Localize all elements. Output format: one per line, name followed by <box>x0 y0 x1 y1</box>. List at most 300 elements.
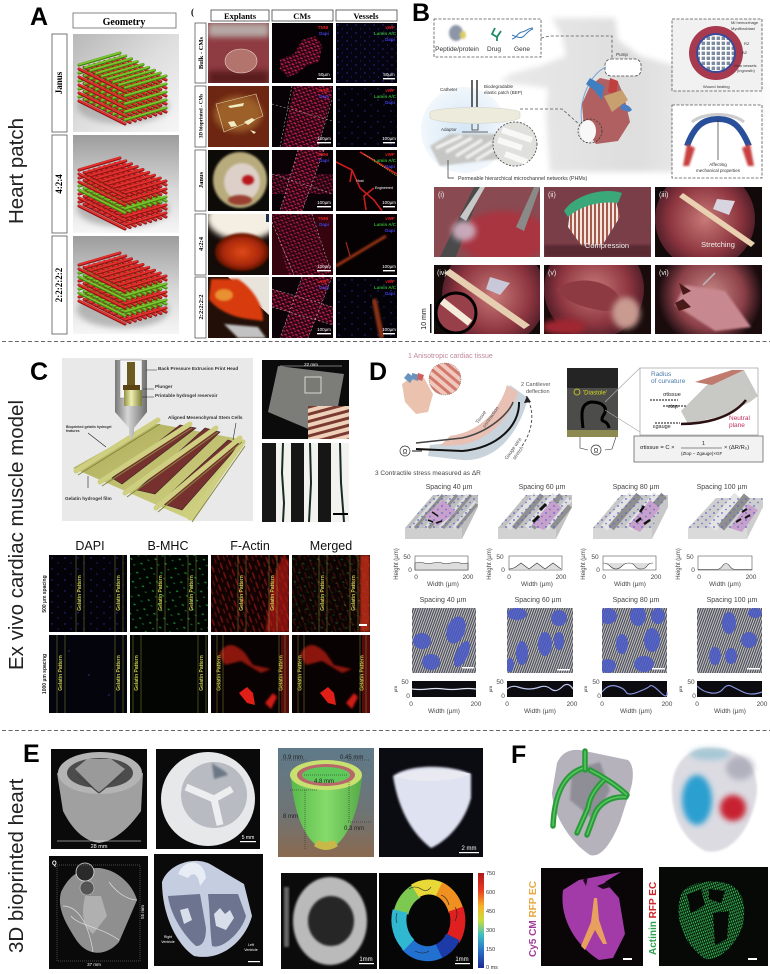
PHMs label: Permeable hierarchical microchannel networks (PHMs) <box>458 176 587 182</box>
detail labels <box>651 371 751 430</box>
column header CMs: CMs <box>293 11 311 21</box>
ohm loop: Ω <box>594 448 599 454</box>
CMs row 1: TNNI <box>318 25 328 30</box>
xz strip 40: 0 <box>406 693 410 700</box>
column header Vessels: Vessels <box>353 11 379 21</box>
ventricle CAD model: 0.3 mm <box>344 826 364 832</box>
stray bracket: ( <box>191 7 194 17</box>
vessels row 5: 100µm <box>382 327 396 332</box>
ventricle slice micrograph: 1mm <box>359 957 373 963</box>
row label 2:2:2:2:2 <box>195 277 206 338</box>
lattice render: 4:2:4 <box>73 135 179 233</box>
colour bar with scale <box>478 871 498 971</box>
height axis label 3: Height (µm) <box>581 548 587 580</box>
height profile 60: 200 <box>556 574 567 581</box>
CMs row 5 <box>272 277 333 338</box>
payload labels: Peptide/protein <box>435 46 479 53</box>
channel headers: F-Actin <box>230 539 270 553</box>
height axis label 4: Height (µm) <box>676 548 682 580</box>
catheter <box>472 80 477 107</box>
channel headers: DAPI <box>75 539 105 553</box>
xz strip 60: Width (µm) <box>524 708 556 715</box>
scale bar 10 mm: 10 mm <box>421 308 428 330</box>
vessels row 1 <box>336 23 397 83</box>
vessels row 1: vWF <box>385 25 395 30</box>
stripe micrograph <box>262 443 349 522</box>
panel D <box>369 353 768 715</box>
connector from payload box to pump <box>541 36 612 59</box>
film feature labels: Bioprinted gelatin hydrogel <box>66 425 112 429</box>
CMs row 2: Dapi <box>319 94 329 99</box>
vessels row 3: Engineered <box>375 186 393 190</box>
panel A: geometry <box>30 3 179 334</box>
vessels row 2: 100µm <box>382 136 396 141</box>
C micrograph Actin 500: Gelatin Pattern <box>239 575 245 611</box>
tissue detail circle <box>429 363 461 395</box>
Actinin RFP EC label: Actinin RFP EC <box>648 882 659 955</box>
xz strip 100: 50 <box>687 679 695 686</box>
row label Janus: Janus <box>54 71 64 94</box>
explant photo row 3 <box>208 150 269 211</box>
cantilever labels: Gauge wire <box>504 437 523 461</box>
height profile 80 <box>591 554 662 588</box>
printed construct photo: 22 mm <box>304 362 318 367</box>
explant photo row 4 <box>208 214 269 275</box>
surgery photo i <box>434 187 540 257</box>
surgery photo iii <box>655 187 762 257</box>
ventricle CAD model: 0.9 mm <box>283 755 303 761</box>
C micrograph DAPI 1000 <box>49 635 127 713</box>
dashed divider 2 <box>2 730 770 732</box>
vessels row 2: Dapi <box>385 100 395 105</box>
xz strip 100: Width (µm) <box>714 708 746 715</box>
vessels row 1: 50µm <box>383 72 395 77</box>
sarcomere image 80 <box>602 608 667 673</box>
surgery photo iv <box>434 265 540 334</box>
CMs row 1: 50µm <box>318 72 330 77</box>
C micrograph BMHC 1000 <box>130 635 208 713</box>
schematic labels <box>65 366 243 501</box>
valve model render <box>51 749 147 850</box>
pump <box>605 52 641 76</box>
vessels row 4: Lamin A/C <box>374 222 397 227</box>
vessels row 3: Host <box>356 179 364 183</box>
box: wound healing: MI hemorrhage <box>731 20 759 25</box>
xz strip 100: 0 <box>695 701 699 708</box>
surgery photo i: (i) <box>438 192 444 199</box>
CMs row 4: Dapi <box>319 222 329 227</box>
box: wound healing: RZ <box>744 41 750 46</box>
height profile 80: 0 <box>596 567 600 574</box>
row label 4:2:4 <box>195 214 206 275</box>
C micrograph DAPI 500: Gelatin Pattern <box>116 575 122 611</box>
panel C <box>30 358 370 713</box>
printed heart section <box>154 854 263 966</box>
pump: Pump <box>616 52 628 57</box>
C micrograph Merged 500 <box>292 555 370 632</box>
xz strip 60: 0 <box>501 693 505 700</box>
cantilever labels: deflection <box>526 389 550 395</box>
colour bar with scale: 600 <box>486 890 495 896</box>
detail labels: σtissue <box>663 392 681 398</box>
row label 1000: 1000 µm spacing <box>42 654 48 694</box>
height profile 40: 0 <box>408 567 412 574</box>
formula box <box>634 436 763 462</box>
patch labels: elastic patch (BEP) <box>484 90 523 95</box>
schematic labels: Plunger <box>155 384 173 389</box>
xz strip 80: 200 <box>662 701 673 708</box>
panel letter F: F <box>511 741 526 769</box>
ohmmeter symbol: Ω <box>403 450 408 456</box>
vessels row 3 <box>336 150 397 211</box>
C micrograph DAPI 500 <box>49 555 127 632</box>
detail labels: εtop <box>668 404 678 410</box>
box: mechanical properties: Affecting <box>709 162 727 167</box>
box: wound healing: BZ <box>742 50 748 55</box>
panel E <box>23 740 498 971</box>
cantilever labels <box>475 382 551 461</box>
C micrograph Actin 500 <box>211 555 289 632</box>
CMs row 3: 100µm <box>317 200 331 205</box>
CMs row 4 <box>272 214 333 275</box>
C micrograph DAPI 500: Gelatin Pattern <box>77 575 83 611</box>
magnifier circle <box>493 122 537 166</box>
whole heart CT render: 37 mm <box>87 962 101 967</box>
surgery photo v: (v) <box>548 270 556 277</box>
panel A: histology grid <box>191 7 397 338</box>
height profile 80: 200 <box>651 574 662 581</box>
CMs row 4: 100µm <box>317 264 331 269</box>
printed valve photo <box>156 749 260 849</box>
xz strip 60: 50 <box>496 679 504 686</box>
explant photo row 2 <box>208 86 269 147</box>
height profile 100: 0 <box>691 567 695 574</box>
xz strip 40: 50 <box>401 679 409 686</box>
schematic labels: Back Pressure Extrusion Print Head <box>158 366 238 371</box>
cantilever labels: Tissue <box>475 410 488 425</box>
CMs row 5: 100µm <box>317 327 331 332</box>
xz strip 60 <box>488 679 578 715</box>
icon: drug <box>492 28 501 41</box>
CMs row 3 <box>272 150 333 211</box>
CMs row 2: TNNI <box>318 88 328 93</box>
height profile 40 <box>403 554 474 588</box>
gelatin film base <box>73 423 245 521</box>
height profile 100: 50 <box>686 554 694 561</box>
row label 2:2:2:2:2 <box>52 236 67 334</box>
patch glow <box>421 87 507 173</box>
C micrograph BMHC 1000: Gelatin Pattern <box>134 655 140 691</box>
C micrograph Actin 1000 <box>211 635 289 713</box>
activation map: 1mm <box>455 957 469 963</box>
spacing headings row 2: Spacing 60 µm <box>515 597 562 604</box>
row label 3D bioprinted-CMs: 3D bioprinted - CMs <box>200 94 204 138</box>
height profile 40: 50 <box>403 554 411 561</box>
surgery photo ii: Compression <box>585 241 629 250</box>
CMs row 5: vWF <box>318 279 328 284</box>
scale bar 10 mm <box>421 304 432 333</box>
vessels row 3: Dapi <box>385 164 395 169</box>
CMs row 3: Dapi <box>319 158 329 163</box>
panel letter E: E <box>23 740 40 768</box>
payload box: Gene <box>514 46 530 53</box>
spacing headings row 1: Spacing 40 µm <box>426 484 473 491</box>
colour bar with scale: 300 <box>486 928 495 934</box>
vessels row 3: Lamin A/C <box>374 158 397 163</box>
xz strip 80: 50 <box>592 679 600 686</box>
C micrograph Merged 1000: Gelatin Pattern <box>298 655 304 691</box>
adaptor <box>462 124 488 132</box>
sarcomere image 100 <box>697 608 762 673</box>
spacing headings row 1: Spacing 60 µm <box>519 484 566 491</box>
height profile 100: Width (µm) <box>709 581 741 588</box>
printed heart section: Right <box>164 935 172 939</box>
xz strip 40: 200 <box>471 701 482 708</box>
xz strip 100 <box>678 679 768 715</box>
C micrograph BMHC 500 <box>130 555 208 632</box>
geometry header: Geometry <box>103 17 145 28</box>
row label 2:2:2:2:2: 2:2:2:2:2 <box>54 267 64 302</box>
C micrograph Actin 1000: Gelatin Pattern <box>278 655 284 691</box>
heart with green vessels <box>552 750 633 855</box>
whole heart CT render: 55 mm <box>140 905 145 919</box>
spacing headings row 1: Spacing 80 µm <box>613 484 660 491</box>
height profile 60: 0 <box>501 567 505 574</box>
microchannel lattice <box>430 134 506 166</box>
side heading: Ex vivo cardiac muscle model: Ex vivo cardiac muscle model <box>5 400 28 670</box>
printed heart section: Ventricle <box>244 948 258 952</box>
height profile 40: Width (µm) <box>427 581 459 588</box>
spacing headings row 2: Spacing 80 µm <box>613 597 660 604</box>
cantilever labels: stretch <box>512 445 525 461</box>
row label Bulk-CMs: Bulk - CMs <box>198 36 205 69</box>
channel headers <box>75 539 352 553</box>
surgery photo iii: (iii) <box>659 192 668 199</box>
xz strip 80: 0 <box>597 693 601 700</box>
spacing headings row 2: Spacing 100 µm <box>707 597 758 604</box>
cantilever labels: contraction <box>482 405 501 429</box>
ridges <box>76 420 243 518</box>
ventricle CAD model: 4.8 mm <box>314 779 334 785</box>
colour bar with scale: 150 <box>486 947 495 953</box>
printed valve photo: 5 mm <box>242 835 254 841</box>
schematic labels: Gelatin hydrogel film <box>65 496 112 501</box>
Cy5 CM RFP EC label: Cy5 CM RFP EC <box>528 881 539 957</box>
geometry header <box>73 13 176 28</box>
C micrograph Merged 1000 <box>292 635 370 713</box>
C micrograph BMHC 500: Gelatin Pattern <box>189 575 195 611</box>
formula box: 1 <box>702 441 705 447</box>
detail labels: Neutral <box>729 415 751 422</box>
surgery photo iii: Stretching <box>701 240 735 249</box>
lattice render: Janus <box>73 34 179 132</box>
height profile 60: 50 <box>496 554 504 561</box>
C micrograph Actin 1000: Gelatin Pattern <box>216 655 222 691</box>
xz strip 80: µm <box>583 686 588 692</box>
xz strip 80 <box>583 679 673 715</box>
CMs row 2: 100µm <box>317 136 331 141</box>
surgery photo ii: (ii) <box>548 192 556 199</box>
C micrograph DAPI 1000: Gelatin Pattern <box>58 655 64 691</box>
CMs row 2 <box>272 86 333 147</box>
C micrograph DAPI 1000: Gelatin Pattern <box>116 655 122 691</box>
ohm loop <box>580 437 616 455</box>
column header Explants: Explants <box>224 11 257 21</box>
heart with dye perfusion <box>672 748 757 852</box>
detail zoom box <box>605 368 758 435</box>
side heading: Heart patch: Heart patch <box>5 118 28 224</box>
xz strip 100: µm <box>678 686 683 692</box>
spacing headings row 2: Spacing 40 µm <box>420 597 467 604</box>
detail labels: Radius <box>651 371 672 378</box>
row label 4:2:4: 4:2:4 <box>54 174 64 194</box>
dashed divider 1 <box>2 340 770 342</box>
whole heart CT render <box>49 856 148 969</box>
row label Bulk-CMs <box>195 23 206 83</box>
channel headers: B-MHC <box>148 539 188 553</box>
C micrograph Merged 500: Gelatin Pattern <box>351 575 357 611</box>
CMs row 4: TNNI <box>318 216 328 221</box>
xz strip 60: 0 <box>505 701 509 708</box>
vessels row 4: Dapi <box>385 228 395 233</box>
purple heart section <box>541 868 643 966</box>
body silhouette <box>500 18 770 172</box>
vessels row 2: Lamin A/C <box>374 94 397 99</box>
groove block 80 <box>593 495 668 539</box>
formula box: (Ztop − Zgauge)×GF <box>681 451 723 456</box>
cantilever labels: 2 Cantilever <box>521 382 551 388</box>
height profile 60: 0 <box>507 574 511 581</box>
C micrograph BMHC 1000: Gelatin Pattern <box>199 655 205 691</box>
panel B <box>412 0 770 347</box>
CMs row 3: TNNI <box>318 152 328 157</box>
ventricle slice micrograph <box>281 873 377 969</box>
sarcomere image 40 <box>412 608 476 673</box>
row label Janus <box>52 34 67 132</box>
row label 4:2:4: 4:2:4 <box>198 236 205 251</box>
xz strip 100: 0 <box>692 693 696 700</box>
vessels row 4: vWF <box>385 216 395 221</box>
patch labels: Biodegradable <box>484 84 514 89</box>
panel F <box>511 741 768 966</box>
xz strip 60: µm <box>488 686 493 692</box>
film feature labels <box>66 425 112 433</box>
height profile 100: 200 <box>746 574 757 581</box>
cell bands <box>112 425 240 510</box>
vessels row 5: Dapi <box>385 291 395 296</box>
cantilever <box>416 385 532 460</box>
surgery photo vi: (vi) <box>659 270 669 277</box>
explant photo row 1 <box>208 23 269 83</box>
tube <box>581 67 606 124</box>
row label 2:2:2:2:2: 2:2:2:2:2 <box>198 295 205 319</box>
colour bar with scale: 0 ms <box>486 965 498 971</box>
xz strip 100: 200 <box>757 701 768 708</box>
box: wound healing: Myofibroblast <box>731 26 756 31</box>
height profile 40: 0 <box>414 574 418 581</box>
icon: protein <box>449 25 466 41</box>
panel letter C: C <box>30 358 48 386</box>
vessels row 5 <box>336 277 397 338</box>
height profile 80: 0 <box>602 574 606 581</box>
height profile 80: 50 <box>591 554 599 561</box>
row label 4:2:4 <box>52 135 67 233</box>
row label Janus: Janus <box>198 171 205 188</box>
height profile 40: 200 <box>463 574 474 581</box>
heart sketch <box>402 373 433 414</box>
vessels row 2: vWF <box>385 88 395 93</box>
printed construct photo <box>262 360 349 439</box>
surgery photo iv: (iv) <box>437 270 447 277</box>
xz strip 60: 200 <box>567 701 578 708</box>
colour bar with scale: 450 <box>486 909 495 915</box>
printed ventricle photo: 2 mm <box>462 846 477 852</box>
xz strip 40 <box>393 679 482 715</box>
patch labels: Adaptor <box>441 127 457 132</box>
detail labels: of curvature <box>651 378 686 385</box>
detail labels: εgauge <box>653 424 671 430</box>
side heading: 3D bioprinted heart: 3D bioprinted heart <box>5 778 28 953</box>
schematic labels: Aligned Mesenchymal Stem Cells <box>168 415 243 420</box>
height profile 100 <box>686 554 757 588</box>
icon: gene helix <box>512 28 533 39</box>
CMs row 5: Dapi <box>319 285 329 290</box>
panel letter A: A <box>30 3 48 31</box>
box: wound healing: Wound healing <box>703 84 730 89</box>
groove block 100 <box>688 496 763 539</box>
printed ventricle photo <box>379 748 483 857</box>
patch labels <box>440 84 523 132</box>
height profile 60: Width (µm) <box>521 581 553 588</box>
spacing headings row 2 <box>420 597 758 604</box>
heart illustration <box>580 78 632 144</box>
diastole photo: 'Diastole' <box>583 390 607 396</box>
vessels row 4 <box>336 214 397 275</box>
xz strip 40: µm <box>393 686 398 692</box>
column header Explants <box>211 10 269 21</box>
box: mechanical properties: mechanical properties <box>696 168 741 173</box>
explant photo row 5 <box>208 277 269 338</box>
patch labels: Catheter <box>440 87 458 92</box>
green heart section <box>659 867 768 966</box>
C micrograph BMHC 500: Gelatin Pattern <box>158 575 164 611</box>
ventricle CAD model: 0.45 mm <box>340 755 363 761</box>
vessels row 1: Dapi <box>385 37 395 42</box>
column header CMs <box>272 10 333 21</box>
whole heart CT render: Q <box>52 861 57 867</box>
colour bar with scale: 750 <box>486 871 495 877</box>
patch connector <box>520 109 580 125</box>
surgery photo v <box>544 265 651 334</box>
patch highlight circle <box>578 119 602 143</box>
groove block 60 <box>498 495 572 539</box>
CMs row 1: Dapi <box>319 31 329 36</box>
height profile 60 <box>496 554 567 588</box>
printed heart section: Left <box>248 943 254 947</box>
leader lines <box>88 370 236 488</box>
box: mechanical properties <box>672 105 762 178</box>
vessels row 5: vWF <box>385 279 395 284</box>
vessels row 4: 100µm <box>382 264 396 269</box>
surgery photo ii <box>544 187 651 257</box>
printed heart section: Ventricle <box>161 940 175 944</box>
box: wound healing: (ingrowth) <box>737 68 755 73</box>
ohmmeter symbol <box>400 446 422 456</box>
height profile 100: 0 <box>697 574 701 581</box>
surgery photo vi <box>655 265 762 334</box>
groove block 40 <box>405 495 478 539</box>
row label 500: 500 µm spacing <box>42 575 48 613</box>
